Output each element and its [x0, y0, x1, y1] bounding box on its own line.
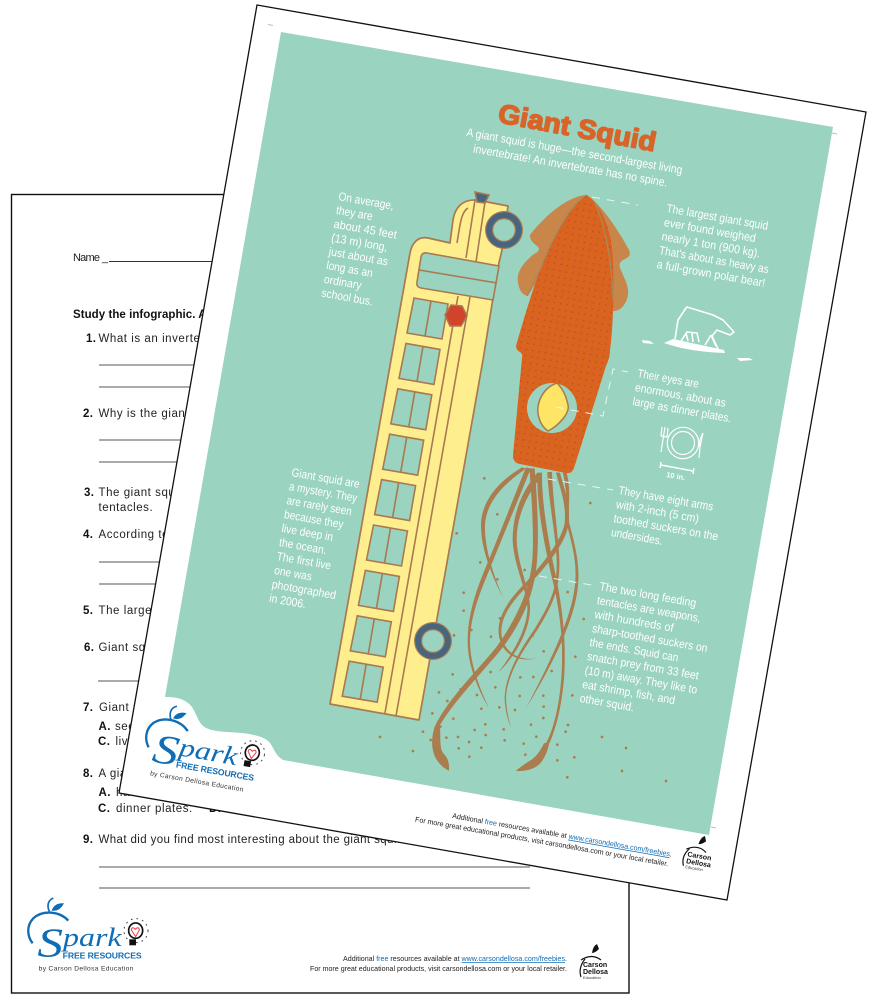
question 7: live	[116, 736, 135, 748]
text: bus length	[320, 189, 404, 311]
logo: Spark free resources (front): by Carson Dellosa Education	[149, 770, 244, 794]
question 9: 9.	[83, 834, 93, 846]
text: weight: ever found weighed	[663, 215, 757, 245]
text: eyes: large as dinner plates.	[632, 394, 732, 425]
question 1: What is an invertebrate?	[98, 333, 236, 345]
footer credit (front): Additional free resources available at www.carsondellosa.com/freebies.	[452, 811, 673, 859]
question 8	[83, 768, 221, 815]
windshield	[417, 253, 499, 300]
logo: Spark free resources (front)	[139, 702, 270, 796]
panel: back worksheet	[12, 194, 629, 993]
text: bus length: school bus.	[320, 286, 374, 308]
sheet	[119, 5, 866, 900]
question 7: seen	[115, 721, 142, 733]
text: arms: They have eight arms	[617, 483, 715, 514]
question 7: A.	[98, 721, 111, 733]
intro text: invertebrate! An invertebrate has no spine.	[472, 142, 669, 190]
text: bus length: long as an	[325, 258, 374, 280]
side stripes	[385, 296, 470, 716]
question 3: 3.	[84, 487, 94, 499]
teal background	[165, 32, 833, 835]
text: arms: toothed suckers on the	[613, 511, 720, 543]
text: feeding tentacles: with hundreds of	[593, 607, 675, 635]
text: feeding tentacles	[578, 579, 716, 725]
text: eyes: Their eyes are	[636, 366, 700, 391]
logo: Carson Dellosa: Dellosa	[583, 969, 608, 976]
question 6: 6.	[84, 642, 94, 654]
logo: Spark free resources (front): park	[175, 732, 240, 771]
squid tentacles	[432, 467, 578, 771]
footer credit: Additional free resources available at www.carsondellosa.com/freebies.	[343, 954, 567, 963]
text: weight: nearly 1 ton (900 kg).	[661, 229, 761, 260]
logo: Carson Dellosa (front)	[681, 833, 716, 873]
text: bus length: (13 m) long,	[330, 231, 389, 254]
logo: Spark free resources: FREE RESOURCES	[63, 950, 142, 960]
left fin	[518, 195, 587, 296]
panel: front infographic sheet	[119, 5, 866, 900]
text: weight	[656, 201, 777, 290]
text: mystery: because they	[283, 507, 345, 531]
right fin	[590, 197, 630, 311]
question 6: Giant squid	[98, 642, 163, 654]
school bus	[330, 192, 523, 720]
text: feeding tentacles: eat shrimp, fish, and	[581, 677, 676, 707]
name field	[73, 252, 260, 264]
logo: Spark free resources	[28, 898, 148, 973]
question 7	[83, 702, 163, 748]
question 7: Giant squid	[99, 702, 163, 714]
eye	[527, 383, 577, 433]
bus body	[330, 200, 508, 720]
question 4: According to the	[98, 529, 190, 541]
question 9	[83, 834, 530, 888]
text: mystery: Giant squid are	[290, 465, 361, 491]
text: bus length: just about as	[327, 244, 389, 269]
logo: Carson Dellosa (front): Dellosa	[686, 858, 711, 869]
question 5: The largest giant	[98, 605, 194, 617]
question 3: tentacles.	[98, 502, 153, 514]
text: bus length: On average,	[337, 189, 395, 213]
text: mystery: in 2006.	[268, 591, 307, 611]
name field: _	[101, 252, 109, 264]
question 1: 1.	[86, 333, 96, 345]
instructions: Study the infographic. Answer the questions.	[73, 309, 322, 321]
logo: Spark free resources (front): FREE RESOURCES	[175, 759, 255, 783]
text: weight: That's about as heavy as	[658, 243, 770, 276]
question 2: 2.	[83, 408, 93, 420]
footer credit: For more great educational products, visit carsondellosa.com or your local retailer.	[310, 964, 567, 973]
title: Giant Squid	[496, 98, 659, 157]
logo: Carson Dellosa: Carson	[583, 962, 607, 969]
stop light	[475, 192, 489, 203]
logo: Carson Dellosa	[580, 944, 608, 980]
logo: Spark free resources: park	[61, 923, 122, 952]
text: bus length: they are	[335, 203, 374, 223]
logo: Carson Dellosa (front): Education	[685, 864, 703, 872]
icon: polar bear	[642, 307, 753, 361]
hood lines	[457, 200, 485, 262]
text: mystery: photographed	[271, 577, 337, 602]
text: feeding tentacles: snatch prey from 33 feet	[586, 649, 700, 683]
question 3: The giant squid has	[98, 487, 209, 499]
icon: dinner plate: 10 in.	[666, 470, 686, 482]
text: feeding tentacles: tentacles are weapons,	[596, 593, 702, 625]
text: mystery: one was	[273, 563, 313, 583]
question 8: A giant squid	[98, 768, 172, 780]
question 4: 4.	[83, 529, 93, 541]
question 8: dinner plates.	[116, 803, 193, 815]
text: eyes: enormous, about as	[634, 380, 727, 410]
question 9: What did you find most interesting about the giant squid?	[98, 834, 410, 846]
question 1	[86, 333, 240, 387]
worksheet page	[12, 194, 629, 993]
name field: Name	[73, 252, 100, 264]
question 6	[84, 642, 240, 681]
bus windows	[342, 298, 448, 702]
text: eyes	[632, 366, 737, 425]
question 8: hands.	[116, 787, 154, 799]
question 8: 8.	[83, 768, 93, 780]
logo: Spark free resources: S	[37, 921, 63, 967]
text: mystery: a mystery. They	[288, 479, 358, 505]
logo: Spark free resources (front): S	[149, 726, 183, 776]
giant squid body	[513, 195, 630, 473]
logo: Carson Dellosa: Education	[583, 975, 601, 980]
scattered dots	[380, 478, 666, 781]
question 2: Why is the giant squid	[98, 408, 223, 420]
text: weight: a full-grown polar bear!	[656, 257, 766, 290]
icon: dinner plate	[660, 427, 703, 482]
logo: Carson Dellosa (front): Carson	[687, 851, 712, 862]
text: feeding tentacles: sharp-toothed suckers on	[591, 621, 709, 655]
text: mystery: live deep in	[281, 521, 334, 544]
logo: Spark free resources: by Carson Dellosa Education	[39, 966, 134, 973]
stop sign	[445, 305, 467, 326]
question 7: 7.	[83, 702, 93, 714]
front wheel	[485, 211, 523, 249]
question 2	[83, 408, 240, 462]
footer credit	[310, 954, 567, 973]
question 7: C.	[98, 736, 110, 748]
text: feeding tentacles: (10 m) away. They like to	[584, 663, 699, 697]
question 5: 5.	[83, 605, 93, 617]
text: mystery: The first live	[276, 549, 333, 572]
text: feeding tentacles: the ends. Squid can	[589, 635, 680, 665]
text: weight: The largest giant squid	[665, 201, 769, 233]
question 8: A.	[98, 787, 111, 799]
question 3	[84, 487, 209, 514]
question 4	[83, 529, 240, 584]
text: bus length: ordinary	[323, 272, 363, 292]
text: mystery	[268, 465, 361, 617]
text: bus length: about 45 feet	[333, 217, 399, 242]
text: arms: with 2-inch (5 cm)	[614, 497, 700, 526]
callout leader lines	[539, 197, 638, 586]
intro text: A giant squid is huge—the second-largest living	[465, 125, 684, 177]
text: arms	[609, 483, 725, 557]
mantle	[513, 195, 613, 473]
question 8: C.	[98, 803, 110, 815]
text: feeding tentacles: The two long feeding	[598, 579, 697, 610]
question 8: D.	[209, 803, 221, 815]
text: arms: undersides.	[610, 525, 664, 548]
rear wheel	[414, 622, 452, 660]
text: feeding tentacles: other squid.	[579, 691, 635, 714]
text: mystery: are rarely seen	[286, 493, 353, 518]
text: mystery: the ocean.	[278, 535, 328, 557]
footer credit (front): For more great educational products, visit carsondellosa.com or your local retailer.	[414, 815, 669, 868]
